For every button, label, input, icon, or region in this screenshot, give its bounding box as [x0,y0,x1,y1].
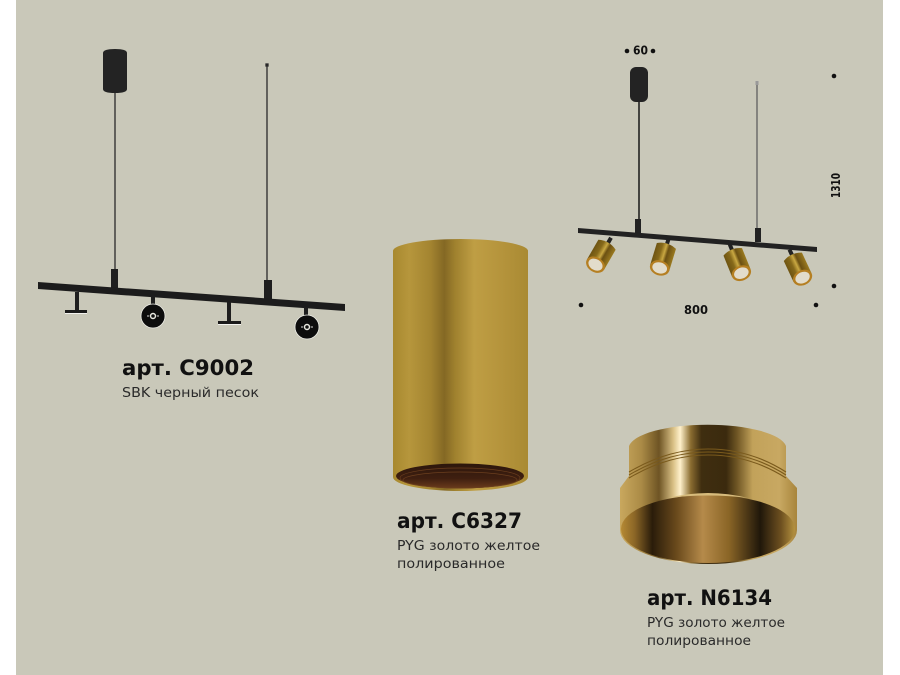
round spot 2 [295,307,319,339]
heading and finish: N6134: арт. N6134 [647,586,772,610]
inner thread ridges [400,468,520,488]
heading and finish: C9002 [122,356,259,401]
dimension: width 60: 60 [633,44,648,58]
dimension: height 1310: 1310 [829,173,843,198]
gold ring N6134 [620,425,797,564]
suspension cord and rod [115,64,268,281]
pendant lamp with gold spots [578,67,817,289]
canopy [630,67,648,102]
gold spot 2 [648,235,678,278]
cylinder body [393,239,528,491]
dimension: height 1310 [829,74,843,288]
cord and rod [639,81,758,229]
bar [578,228,817,252]
ring groove [629,449,786,478]
gold spot 3 [720,241,753,284]
ring inner opening [621,495,795,563]
sleeves on the bar [111,269,272,300]
round spot 1 [141,296,165,328]
heading and finish: N6134 [647,586,785,649]
horizontal bar [38,282,345,311]
ring silhouette [620,425,797,564]
heading and finish: C9002: SBK черный песок [122,386,259,401]
flat spot 2 [218,302,241,325]
dimension: length 800: 800 [684,303,708,317]
heading and finish: C6327: полированное [397,557,505,572]
gold spot 1 [583,233,620,276]
cylinder inner opening [396,464,524,488]
heading and finish: C6327: арт. C6327 [397,509,522,533]
sleeves [635,219,761,242]
heading and finish: C6327: PYG золото желтое [397,539,540,554]
gold spot 4 [780,245,815,289]
pendant lamp C9002 [38,49,345,339]
inner highlight [668,493,748,498]
heading and finish: N6134: PYG золото желтое [647,616,785,631]
ceiling canopy [103,49,127,93]
dimension: width 60 [625,44,655,58]
flat spot 1 [65,292,87,314]
heading and finish: C9002: арт. C9002 [122,356,254,380]
heading and finish: N6134: полированное [647,634,751,649]
dimension: length 800 [579,303,818,317]
gold cylinder C6327 [393,239,528,491]
heading and finish: C6327 [397,509,540,572]
